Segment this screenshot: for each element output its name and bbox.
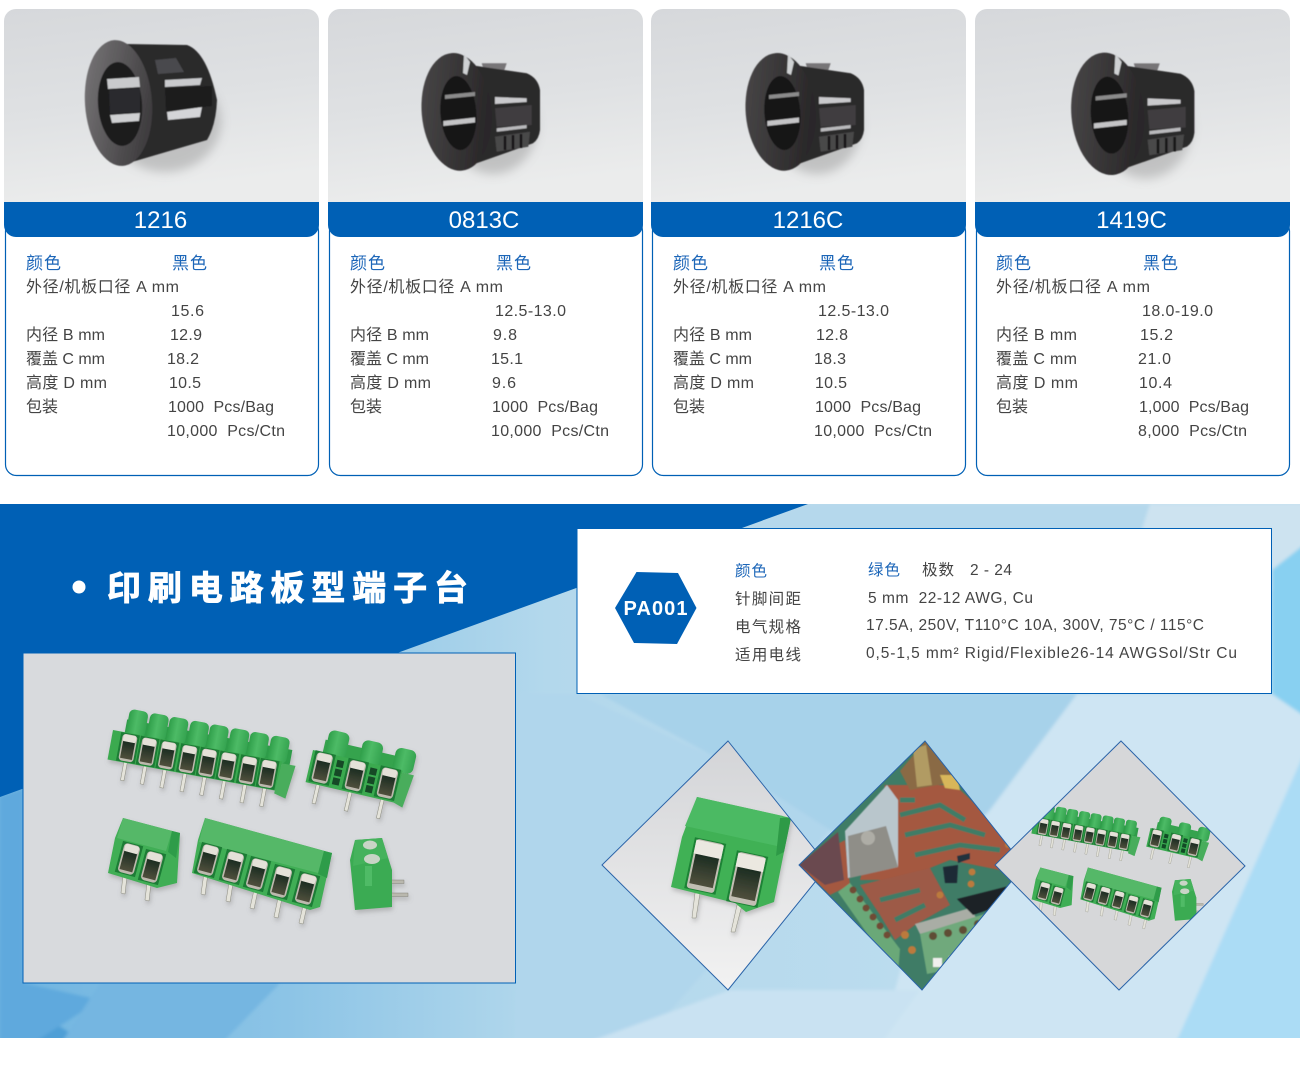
lower section background xyxy=(0,504,1300,1045)
spec text: 18.3 xyxy=(814,351,846,368)
product photo: 1419C bushing xyxy=(975,9,1290,202)
panel background xyxy=(577,528,1272,694)
product photo: 0813C bushing xyxy=(328,9,643,202)
card frame xyxy=(6,220,318,476)
spec text: 1000 Pcs/Bag xyxy=(492,399,598,416)
spec text: 18.0-19.0 xyxy=(1142,303,1213,320)
model number: 1216C xyxy=(773,207,843,234)
model number: 1419C xyxy=(1096,207,1167,234)
spec text: 15.2 xyxy=(1140,327,1173,344)
spec text: 黑色 xyxy=(819,254,855,273)
spec text: 12.8 xyxy=(816,327,848,344)
spec rows: 颜色 xyxy=(735,562,767,580)
spec text: 高度 D mm xyxy=(673,374,754,392)
spec text: 8,000 Pcs/Ctn xyxy=(1138,423,1247,440)
spec text: 高度 D mm xyxy=(26,374,107,392)
blue banner xyxy=(0,504,808,797)
spec text: 黑色 xyxy=(172,254,208,273)
spec text: 内径 B mm xyxy=(996,326,1077,344)
spec text: 12.5-13.0 xyxy=(818,303,889,320)
spec rows: 绿色 xyxy=(868,561,900,579)
spec text: 12.5-13.0 xyxy=(495,303,566,320)
spec text: 9.6 xyxy=(492,375,516,392)
spec rows: 5 mm 22-12 AWG, Cu xyxy=(868,590,1033,607)
spec rows: 2 - 24 xyxy=(970,562,1012,579)
card frame xyxy=(976,220,1290,476)
spec text: 1000 Pcs/Bag xyxy=(815,399,921,416)
panel: bushing 1419C xyxy=(975,9,1290,476)
model number: 1216 xyxy=(134,207,187,234)
spec text: 1,000 Pcs/Bag xyxy=(1139,399,1249,416)
spec text: 包装 xyxy=(673,398,705,416)
heading text: 印刷电路板型端子台 xyxy=(107,561,468,610)
spec text: 颜色 xyxy=(26,254,62,273)
model bar xyxy=(975,202,1290,237)
spec text: 内径 B mm xyxy=(673,326,752,344)
spec text: 覆盖 C mm xyxy=(996,350,1077,368)
spec rows: 针脚间距 xyxy=(735,590,801,608)
model number: 0813C xyxy=(449,207,519,234)
spec text: 外径/机板口径 A mm xyxy=(996,278,1150,296)
diamond photo: circuit board xyxy=(799,741,1024,990)
hexagon badge xyxy=(615,572,696,644)
spec rows: 17.5A, 250V, T110°C 10A, 300V, 75°C / 115°C xyxy=(866,617,1204,634)
panel: PA001 spec xyxy=(577,528,1272,694)
spec text: 10.5 xyxy=(169,375,201,392)
diamond photo: terminal set xyxy=(995,741,1245,990)
spec rows: 0,5-1,5 mm² Rigid/Flexible26-14 AWGSol/Str Cu xyxy=(866,645,1237,662)
spec text: 21.0 xyxy=(1138,351,1171,368)
product photo: terminal block set xyxy=(23,653,516,983)
spec text: 内径 B mm xyxy=(26,326,105,344)
spec text: 黑色 xyxy=(1143,254,1179,273)
spec text xyxy=(26,254,285,440)
spec text: 包装 xyxy=(350,398,382,416)
spec text: 颜色 xyxy=(673,254,709,273)
model bar xyxy=(328,202,643,237)
spec text: 颜色 xyxy=(350,254,386,273)
spec text: 覆盖 C mm xyxy=(350,350,429,368)
spec text: 覆盖 C mm xyxy=(26,350,105,368)
spec text: 1000 Pcs/Bag xyxy=(168,399,274,416)
spec text: 10.5 xyxy=(815,375,847,392)
spec text: 外径/机板口径 A mm xyxy=(673,278,826,296)
spec text: 12.9 xyxy=(170,327,202,344)
hexagon badge: PA001 xyxy=(624,598,688,620)
spec text: 10,000 Pcs/Ctn xyxy=(491,423,609,440)
spec text: 覆盖 C mm xyxy=(673,350,752,368)
spec text: 包装 xyxy=(996,398,1028,416)
spec text: 10,000 Pcs/Ctn xyxy=(167,423,285,440)
model bar xyxy=(651,202,966,237)
spec rows: 适用电线 xyxy=(735,646,801,664)
spec text: 高度 D mm xyxy=(996,374,1078,392)
spec text xyxy=(673,254,932,440)
model bar xyxy=(4,202,319,237)
spec text: 9.8 xyxy=(493,327,517,344)
spec text: 颜色 xyxy=(996,254,1032,273)
spec text: 内径 B mm xyxy=(350,326,429,344)
spec text: 10,000 Pcs/Ctn xyxy=(814,423,932,440)
product photo: 1216 bushing xyxy=(4,9,319,202)
spec text: 外径/机板口径 A mm xyxy=(350,278,503,296)
spec text: 15.6 xyxy=(171,303,204,320)
panel: bushing 0813C xyxy=(328,9,643,476)
diamond photo: two-pole terminal xyxy=(602,741,828,990)
spec rows: 电气规格 xyxy=(735,618,801,636)
heading xyxy=(72,561,468,610)
spec text: 10.4 xyxy=(1139,375,1172,392)
spec text: 外径/机板口径 A mm xyxy=(26,278,179,296)
spec text: 15.1 xyxy=(491,351,523,368)
card frame xyxy=(652,220,966,476)
spec text: 18.2 xyxy=(167,351,199,368)
spec rows: 极数 xyxy=(922,561,954,579)
spec text: 高度 D mm xyxy=(350,374,431,392)
panel: bushing 1216 xyxy=(4,9,319,476)
product photo: 1216C bushing xyxy=(651,9,966,202)
spec text: 黑色 xyxy=(496,254,532,273)
bullet xyxy=(72,580,86,594)
card frame xyxy=(330,220,642,476)
spec rows xyxy=(735,561,1237,664)
panel: bushing 1216C xyxy=(651,9,966,476)
spec text xyxy=(996,254,1249,440)
spec text: 包装 xyxy=(26,398,58,416)
spec text xyxy=(350,254,609,440)
